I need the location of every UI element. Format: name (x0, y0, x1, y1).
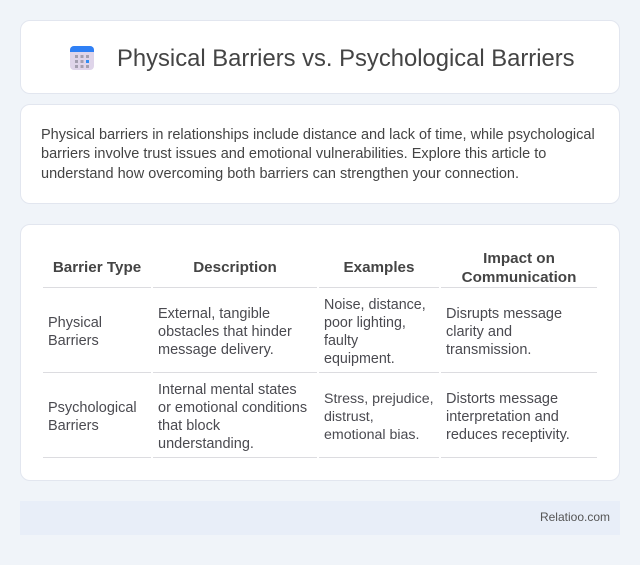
row 1: impact: transmission. (446, 342, 531, 358)
panel: introduction (20, 104, 620, 204)
header: impact on communication: Communication (462, 269, 576, 286)
row 2: description (158, 382, 307, 452)
intro text: understand how overcoming both barriers can strengthen your connection. (41, 166, 519, 182)
header: barrier type: Barrier Type (53, 259, 141, 276)
row 2: impact: Distorts message (446, 391, 558, 407)
intro text: barriers involve trust issues and emotional vulnerabilities. Explore this article to (41, 146, 546, 162)
row 1: physical barriers (48, 315, 102, 349)
comparison table (43, 250, 597, 458)
row 1: description: External, tangible (158, 306, 270, 322)
row 1: impact: clarity and (446, 324, 512, 340)
row 2: psychological barriers: Psychological (48, 400, 137, 416)
row 1: examples (324, 297, 426, 367)
row 1: description: message delivery. (158, 342, 274, 358)
row 2: impact (446, 391, 570, 443)
row 1: description: obstacles that hinder (158, 324, 292, 340)
title: Physical Barriers vs. Psychological Barriers (117, 45, 575, 72)
row 2: examples (324, 391, 434, 443)
intro text (41, 127, 595, 182)
footer bar (20, 501, 620, 535)
row 2: description: Internal mental states (158, 382, 297, 398)
row 1: impact: Disrupts message (446, 306, 562, 322)
row 2: psychological barriers: Barriers (48, 418, 99, 434)
row 1: examples: Noise, distance, (324, 297, 426, 313)
row 2: description: understanding. (158, 436, 254, 452)
footer credit: Relatioo.com (540, 510, 610, 524)
row 2: examples: Stress, prejudice, (324, 391, 434, 407)
panel: comparison table (20, 224, 620, 481)
row 2: examples: distrust, (324, 409, 374, 425)
header: impact on communication: Impact on (483, 250, 555, 267)
row 2: description: that block (158, 418, 220, 434)
row 2: impact: reduces receptivity. (446, 427, 570, 443)
row 1: physical barriers: Barriers (48, 333, 99, 349)
icon: calendar (70, 46, 94, 70)
row 2: psychological barriers (48, 400, 137, 434)
header: description: Description (193, 259, 277, 276)
row 1: impact (446, 306, 562, 358)
header: impact on communication (462, 250, 576, 286)
row 2: description: or emotional conditions (158, 400, 307, 416)
row 2: examples: emotional bias. (324, 427, 419, 443)
row 1: examples: poor lighting, (324, 315, 406, 331)
row 1: description (158, 306, 292, 358)
intro text: Physical barriers in relationships include distance and lack of time, while psychological (41, 127, 595, 143)
row 2: impact: interpretation and (446, 409, 559, 425)
header: examples: Examples (344, 259, 414, 276)
row 1: examples: faulty (324, 333, 358, 349)
row 1: physical barriers: Physical (48, 315, 102, 331)
row 1: examples: equipment. (324, 351, 395, 367)
panel: title card (20, 20, 620, 94)
